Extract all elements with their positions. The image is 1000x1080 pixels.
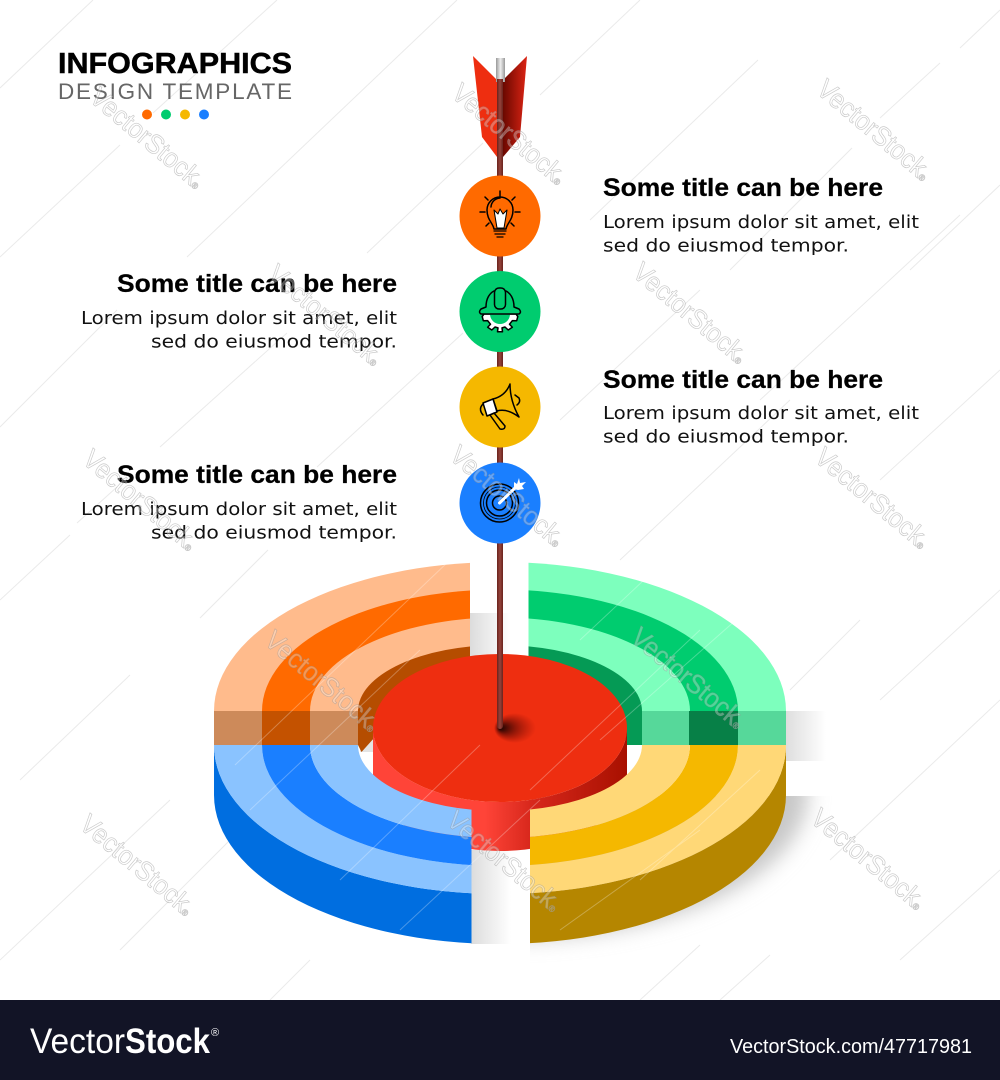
arrow shaft: [497, 79, 503, 729]
step 4: blue circle with target: [460, 462, 540, 544]
icon: light bulb: [480, 191, 520, 237]
text: VectorStock®: [84, 82, 211, 195]
text: VectorStock®: [262, 259, 389, 372]
quadrant: orange back left: [214, 562, 470, 752]
text: VectorStock®: [625, 622, 752, 735]
title block: DESIGN TEMPLATE: [58, 79, 292, 104]
text: VectorStock®: [444, 440, 571, 553]
quadrant: yellow front right: [530, 745, 786, 944]
footer logo: ®: [211, 1027, 219, 1039]
arrow fletching: [473, 56, 527, 157]
text block: lower right: Some title can be here: [603, 366, 883, 394]
text block: top right: [603, 174, 919, 256]
text: VectorStock®: [77, 444, 204, 557]
text: VectorStock®: [805, 803, 932, 916]
target chart: [212, 562, 826, 944]
text block: upper left: Some title can be here: [117, 270, 397, 298]
text block: upper left: [81, 270, 397, 352]
title block: [58, 48, 292, 120]
footer image id: VectorStock.com/47717981: [730, 1036, 972, 1058]
text: VectorStock®: [74, 809, 201, 922]
footer logo: Vector: [30, 1022, 125, 1061]
text block: lower left: sed do eiusmod tempor.: [151, 522, 397, 544]
step 3: yellow circle with megaphone: [460, 366, 540, 448]
text: VectorStock®: [259, 625, 386, 738]
text block: upper left: sed do eiusmod tempor.: [151, 332, 397, 352]
text: VectorStock®: [441, 805, 568, 918]
step 1: orange circle with light bulb: [460, 176, 540, 256]
text: VectorStock®: [809, 442, 936, 555]
text block: lower right: [603, 366, 919, 448]
title block: INFOGRAPHICS: [58, 48, 292, 80]
text: VectorStock®: [811, 74, 938, 187]
arrow: [473, 56, 527, 729]
footer logo: [30, 1022, 219, 1061]
text: VectorStock®: [627, 257, 754, 370]
icon: target and dart: [480, 478, 526, 522]
text block: top right: sed do eiusmod tempor.: [603, 236, 849, 256]
footer bar: [0, 1000, 1000, 1080]
text block: top right: Some title can be here: [603, 174, 883, 202]
text block: lower left: [81, 461, 397, 544]
quadrant: green back right: [528, 562, 786, 745]
central red cylinder: [373, 654, 627, 851]
text block: lower right: sed do eiusmod tempor.: [603, 426, 849, 448]
footer logo: Stock: [125, 1022, 210, 1061]
text block: lower right: Lorem ipsum dolor sit amet, elit: [603, 403, 919, 424]
icon: helmet and gear: [480, 288, 520, 332]
text block: lower left: Lorem ipsum dolor sit amet, elit: [81, 499, 397, 520]
text block: upper left: Lorem ipsum dolor sit amet, elit: [81, 308, 397, 329]
text: VectorStock®: [446, 78, 573, 191]
icon: megaphone: [480, 384, 520, 429]
text block: top right: Lorem ipsum dolor sit amet, elit: [603, 212, 919, 233]
step 2: green circle with helmet and gear: [460, 271, 540, 352]
ground shadows: [360, 613, 818, 948]
quadrant: blue front left: [214, 745, 472, 944]
text block: lower left: Some title can be here: [117, 461, 397, 489]
